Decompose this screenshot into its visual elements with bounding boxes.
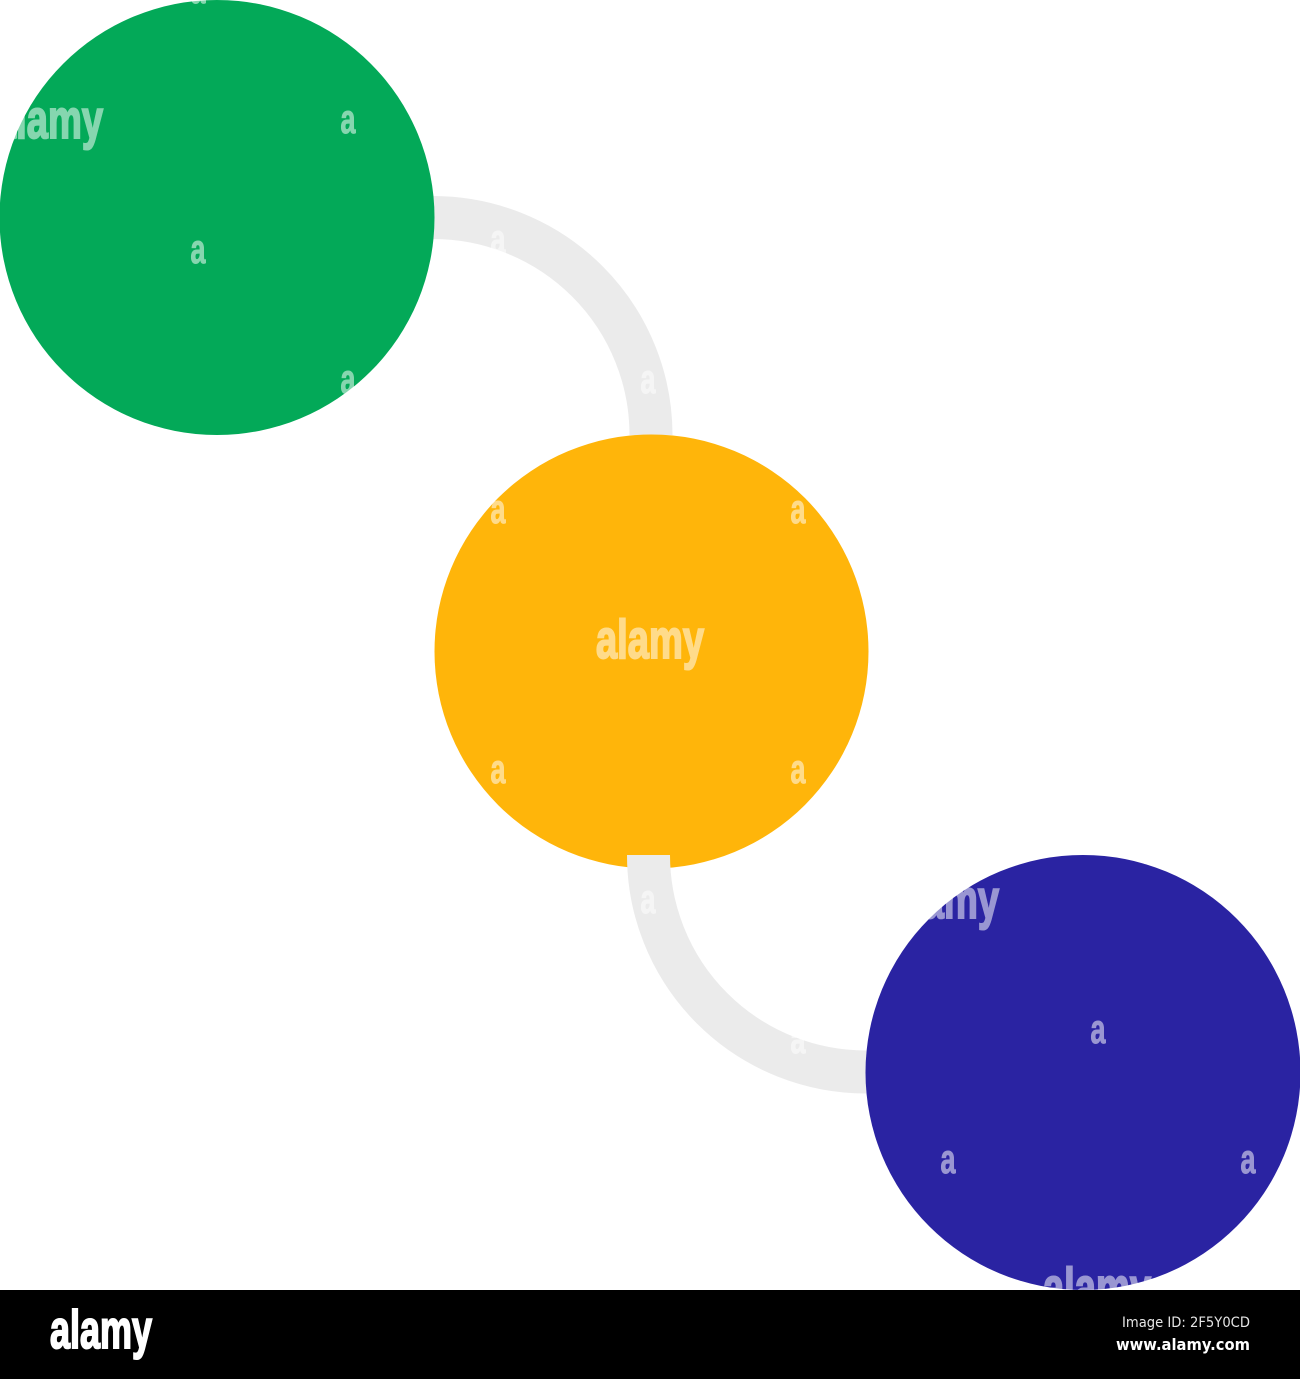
watermarks: a — [340, 96, 356, 142]
watermarks: a — [190, 226, 206, 272]
watermarks: a — [490, 216, 506, 262]
circle: blue — [866, 855, 1300, 1290]
connector arc: green to yellow — [433, 218, 651, 435]
connector arc: yellow to blue — [648, 855, 866, 1072]
watermarks: alamy — [1043, 1256, 1151, 1318]
watermarks: a — [940, 1136, 956, 1182]
watermarks: a — [790, 486, 806, 532]
watermarks: a — [1240, 1136, 1256, 1182]
image id: Image ID: 2F5Y0CD — [1122, 1315, 1250, 1331]
watermarks: a — [790, 746, 806, 792]
watermarks: a — [640, 876, 656, 922]
watermarks: a — [490, 486, 506, 532]
circle: yellow — [434, 434, 868, 868]
watermarks: a — [490, 746, 506, 792]
footer logo: alamy — [50, 1300, 152, 1360]
watermarks: a — [640, 356, 656, 402]
watermarks: alamy — [596, 608, 704, 670]
watermarks: a — [1090, 1006, 1106, 1052]
watermarks: a — [790, 1016, 806, 1062]
watermarks: a — [340, 356, 356, 402]
website: www.alamy.com — [1116, 1335, 1250, 1354]
watermarks: alamy — [891, 868, 999, 930]
footer bar — [0, 1290, 1300, 1379]
circle: green — [0, 0, 434, 435]
